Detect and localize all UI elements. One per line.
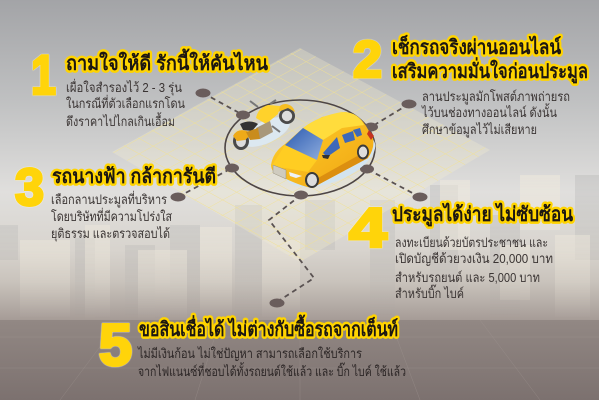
text 1 [66, 79, 185, 129]
text 2 [421, 89, 570, 138]
floor [0, 320, 599, 400]
text 2: ลานประมูลมักโพสต์ภาพถ่ายรถ [422, 89, 570, 105]
text 2: ศึกษาข้อมูลไว้ไม่เสียหาย [422, 122, 537, 138]
icon: motorcycle [233, 100, 295, 153]
number 5: 5 [99, 313, 132, 378]
heading 4: ประมูลได้ง่าย ไม่ซับซ้อน [392, 202, 573, 228]
text 4: สำหรับบิ๊ก ไบค์ [395, 284, 464, 301]
text 2: ไว้บนช่องทางออนไลน์ ดังนั้น [421, 103, 557, 120]
connector lines [178, 93, 420, 302]
text 4: ลงทะเบียนด้วยบัตรประชาชน และ [395, 235, 548, 250]
heading 1: ถามใจให้ดี รักนี้ให้คันไหน [66, 48, 268, 75]
text 4 [395, 235, 553, 301]
text 4: สำหรับรถยนต์ และ 5,000 บาท [395, 270, 540, 285]
number 2: 2 [353, 31, 382, 89]
text 3: โดยบริษัทที่มีความโปร่งใส [51, 208, 172, 224]
number 1: 1 [31, 43, 56, 106]
heading 2: เช็กรถจริงผ่านออนไลน์ [392, 34, 561, 59]
text 4: เปิดบัญชีด้วยวงเงิน 20,000 บาท [395, 251, 553, 266]
icon: car [271, 112, 383, 198]
city skyline [0, 175, 599, 294]
item 3 [15, 159, 216, 242]
heading 5: ขอสินเชื่อได้ ไม่ต่างกับซื้อรถจากเต็นท์ [139, 314, 398, 341]
text 1: ในกรณีที่ตัวเลือกแรกโดน [66, 95, 185, 111]
item 2 [353, 31, 588, 138]
heading 2 [392, 34, 588, 85]
text 1: เผื่อใจสำรองไว้ 2 - 3 รุ่น [66, 79, 182, 96]
ring [225, 100, 375, 196]
text 5 [137, 346, 406, 379]
text 3: ยุติธรรม และตรวจสอบได้ [51, 226, 170, 242]
item 4 [349, 196, 573, 301]
background [0, 0, 599, 320]
heading 3: รถนางฟ้า กล้าการันตี [52, 165, 216, 188]
number 4: 4 [349, 196, 387, 259]
text 1: ดึงราคาไปไกลเกินเอื้อม [66, 112, 175, 129]
ring nodes [170, 88, 428, 308]
text 3 [51, 191, 172, 242]
number 3: 3 [15, 159, 44, 217]
item 1 [31, 43, 268, 129]
floor grid [112, 48, 490, 262]
text 3: เลือกลานประมูลที่บริหาร [51, 191, 167, 208]
text 5: จากไฟแนนซ์ที่ชอบได้ทั้งรถยนต์ใช้แล้ว และ บิ๊ก ไบค์ ใช้แล้ว [138, 362, 406, 379]
text 5: ไม่มีเงินก้อน ไม่ใช่ปัญหา สามารถเลือกใช้บริการ [137, 346, 362, 361]
item 5 [99, 313, 406, 379]
